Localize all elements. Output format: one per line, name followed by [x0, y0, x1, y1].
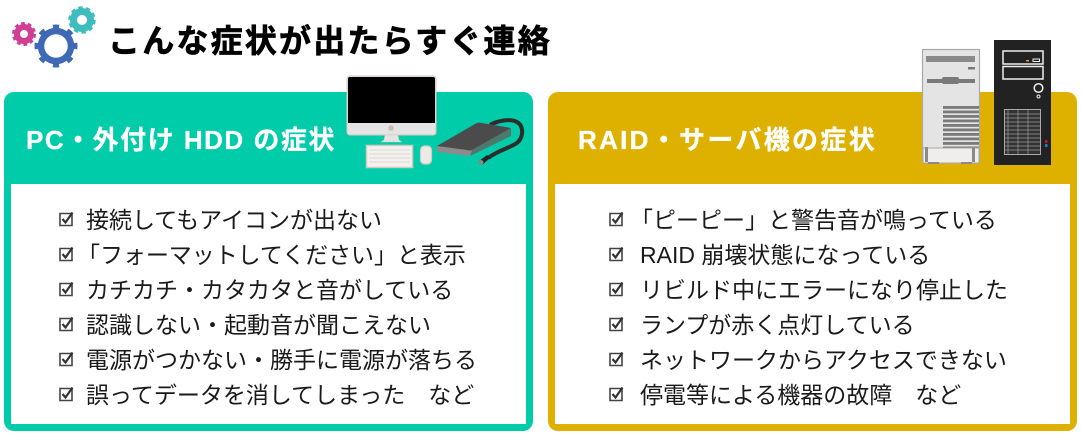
list item 1 — [59, 207, 382, 233]
list item 2 — [59, 242, 466, 268]
panel body: PC symptom list — [11, 184, 526, 424]
list item 4 — [609, 312, 915, 338]
panel: PC and external HDD symptoms — [4, 92, 533, 431]
panel body: PC symptom list: 認識しない・起動音が聞こえない — [86, 312, 431, 338]
panel body: RAID symptom list: 停電等による機器の故障 など — [640, 382, 961, 408]
panel body: RAID symptom list: ランプが赤く点灯している — [640, 312, 915, 338]
panel body: RAID symptom list: リビルド中にエラーになり停止した — [640, 277, 1008, 303]
list item 4 — [59, 312, 431, 338]
panel heading: RAID: RAID・サーバ機の症状 — [578, 125, 877, 155]
icon: desktop computer, keyboard, mouse and external HDD — [346, 76, 524, 168]
list item 3 — [59, 277, 453, 303]
list item 6 — [59, 382, 474, 408]
panel body: PC symptom list: 誤ってデータを消してしまった など — [86, 382, 474, 408]
panel body: PC symptom list: カチカチ・カタカタと音がしている — [86, 277, 453, 303]
list item 2 — [609, 242, 930, 268]
list item 1 — [609, 207, 997, 233]
panel body: PC symptom list: 電源がつかない・勝手に電源が落ちる — [86, 347, 477, 373]
panel heading: PC: PC・外付け HDD の症状 — [26, 125, 336, 155]
icon: gears — [12, 6, 96, 68]
panel body: PC symptom list: 接続してもアイコンが出ない — [86, 207, 382, 233]
list item 6 — [609, 382, 961, 408]
list item 5 — [609, 347, 1007, 373]
list item 5 — [59, 347, 477, 373]
panel body: RAID symptom list — [555, 184, 1070, 424]
panel: RAID and server symptoms — [548, 92, 1077, 431]
panel body: RAID symptom list: ネットワークからアクセスできない — [640, 347, 1007, 373]
panel body: RAID symptom list: 「ピーピー」と警告音が鳴っている — [630, 207, 997, 233]
list item 3 — [609, 277, 1008, 303]
icon: server towers — [922, 40, 1051, 165]
panel body: RAID symptom list: RAID 崩壊状態になっている — [640, 242, 930, 268]
panel body: PC symptom list: 「フォーマットしてください」と表示 — [77, 242, 466, 268]
title: こんな症状が出たらすぐ連絡 — [108, 23, 552, 59]
